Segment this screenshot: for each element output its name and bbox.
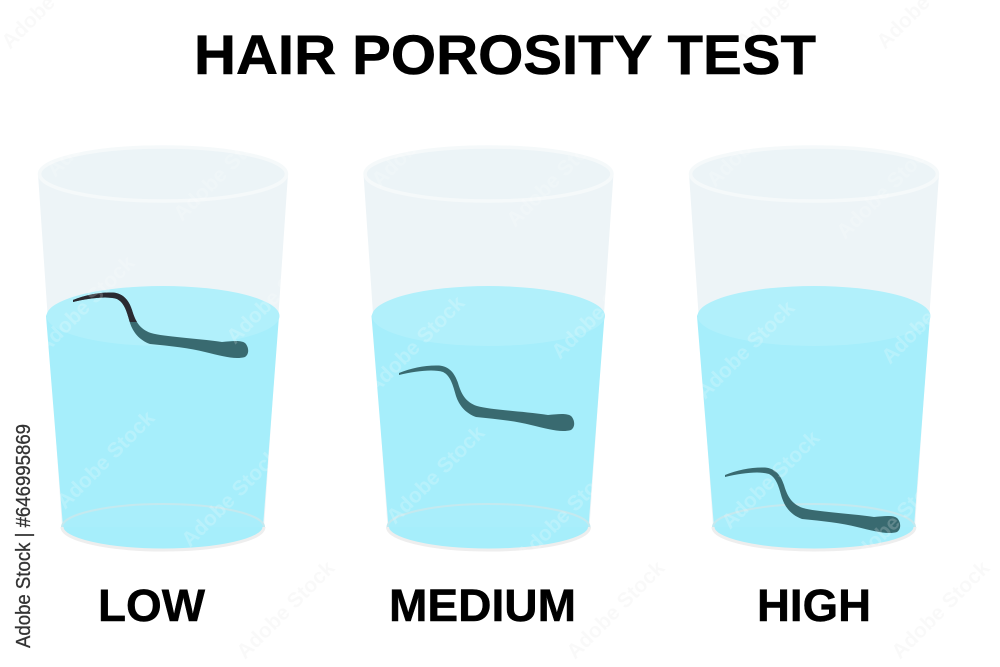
watermarks: Adobe Stock xyxy=(382,421,490,529)
watermarks: Adobe Stock xyxy=(692,296,800,404)
glass rim xyxy=(365,147,612,201)
water xyxy=(46,289,279,549)
panel: high porosity glass xyxy=(689,146,939,550)
water surface xyxy=(46,286,280,346)
watermarks: Adobe Stock xyxy=(367,84,475,192)
watermarks: Adobe Stock xyxy=(502,124,610,232)
label: high: HIGH xyxy=(757,580,871,631)
watermarks: Adobe Stock xyxy=(32,251,140,359)
watermarks: Adobe Stock xyxy=(222,241,330,349)
water xyxy=(697,289,930,549)
hair strand xyxy=(399,365,574,431)
base shadow xyxy=(713,527,915,550)
hair strand xyxy=(725,467,900,533)
panel: low porosity glass xyxy=(38,146,288,550)
panel: medium porosity glass xyxy=(364,146,614,550)
base shadow xyxy=(388,527,590,550)
text: Adobe Stock xyxy=(887,556,995,664)
watermarks: Adobe Stock xyxy=(42,74,150,182)
watermarks: Adobe Stock xyxy=(717,426,825,534)
label: medium: MEDIUM xyxy=(389,580,576,631)
glass rim xyxy=(40,147,286,201)
watermarks: Adobe Stock xyxy=(52,406,160,514)
title: HAIR POROSITY TEST xyxy=(194,23,816,86)
text: Adobe Stock xyxy=(562,556,670,664)
text: Adobe Stock xyxy=(232,556,340,664)
water xyxy=(372,289,604,549)
glass base xyxy=(713,504,915,527)
watermarks: Adobe Stock xyxy=(702,84,810,192)
watermarks xyxy=(32,74,985,574)
base shadow xyxy=(62,527,264,550)
glass body xyxy=(38,146,288,550)
watermarks: Adobe Stock xyxy=(877,261,985,369)
water surface xyxy=(698,286,930,346)
glass base xyxy=(62,504,264,527)
watermarks: Adobe Stock xyxy=(362,291,470,399)
watermarks: Adobe Stock xyxy=(177,444,285,552)
glass body xyxy=(689,146,939,550)
glass body xyxy=(364,146,614,550)
glass base xyxy=(388,504,590,527)
watermarks: Adobe Stock xyxy=(832,136,940,244)
glass rim xyxy=(690,147,938,201)
label: low: LOW xyxy=(98,580,206,631)
watermarks: Adobe Stock xyxy=(169,118,277,226)
hair strand xyxy=(73,292,248,358)
stock id side text: Adobe Stock | #646995869 xyxy=(13,424,35,648)
water surface xyxy=(372,286,605,346)
watermarks: Adobe Stock xyxy=(512,459,620,567)
watermarks: Adobe Stock xyxy=(842,466,950,574)
watermarks: Adobe Stock xyxy=(547,256,655,364)
